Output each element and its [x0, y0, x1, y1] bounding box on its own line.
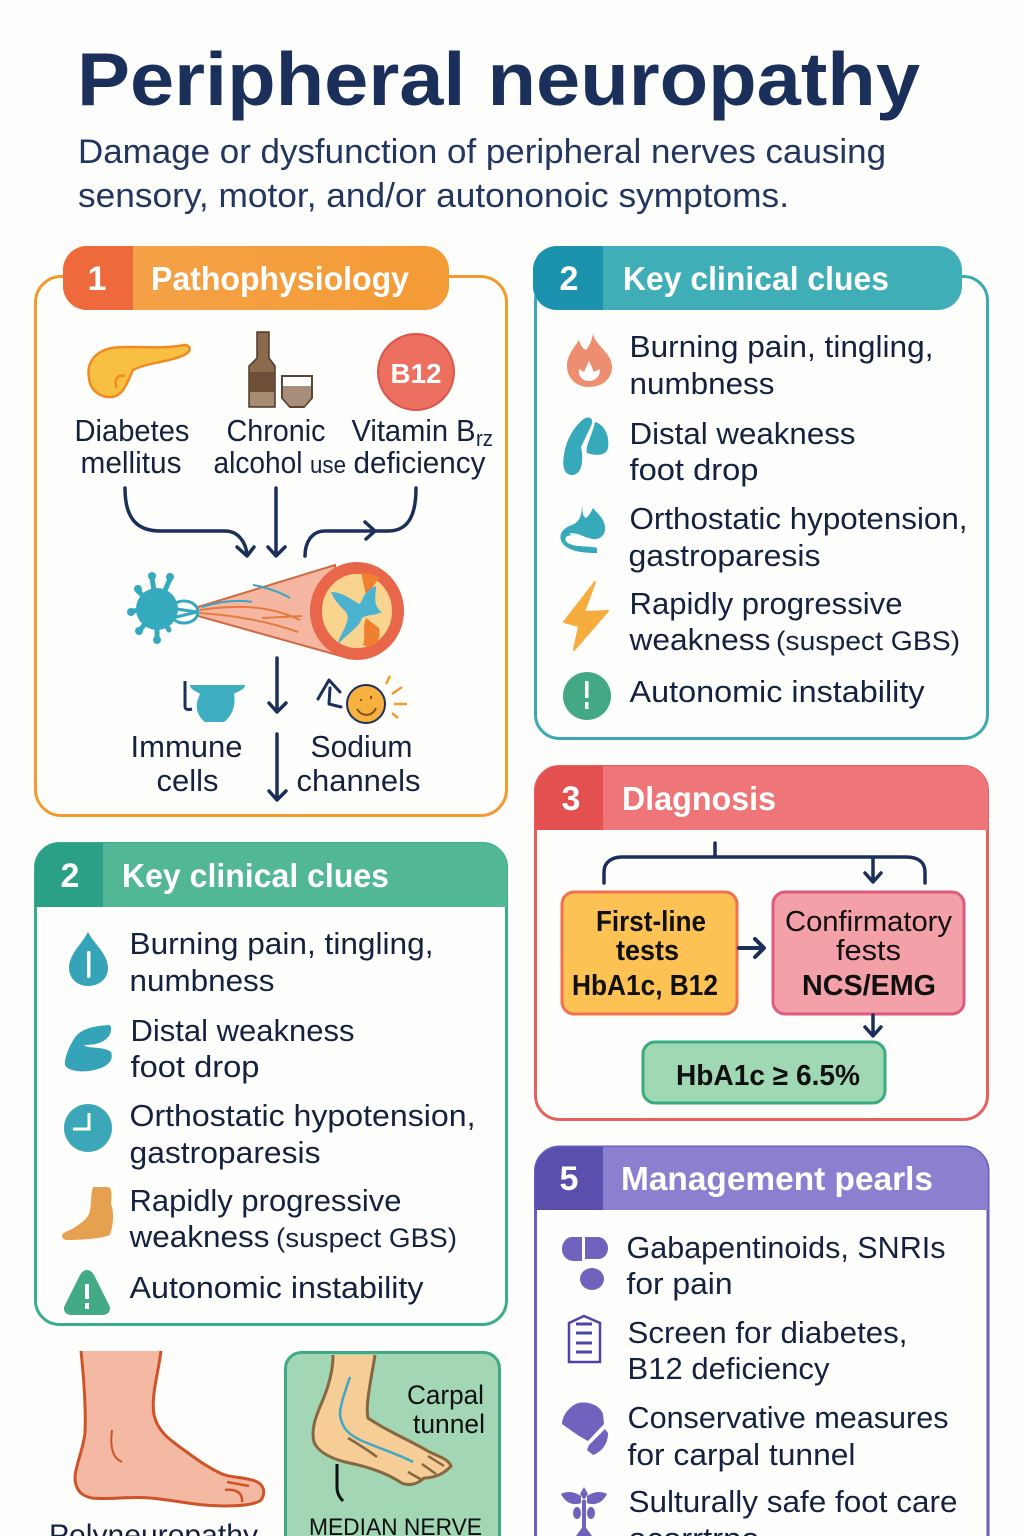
panel header: key clinical clues, green: Key clinical clues: [122, 857, 389, 894]
item: orthostatic hypotension: gastroparesis: [130, 1136, 320, 1170]
item: burning pain: Burning pain, tingling,: [130, 927, 434, 961]
icon: vitamin B12: [378, 334, 454, 410]
box: first-line tests: HbA1c, B12: [572, 970, 718, 1002]
panel header: diagnosis: [535, 766, 988, 830]
panel header: pathophysiology: [63, 246, 449, 310]
label: carpal tunnel: [407, 1380, 485, 1439]
label: sodium channels: Sodium: [310, 730, 412, 764]
box: confirmatory tests: [773, 892, 964, 1014]
item: screen: Screen for diabetes,: [628, 1316, 908, 1350]
panel: pathophysiology: [36, 246, 506, 816]
label: diabetes mellitus: [74, 414, 190, 480]
label: immune cells: Immune: [130, 730, 242, 764]
icon: wrist brace: [562, 1403, 608, 1455]
label: carpal tunnel: tunnel: [413, 1409, 485, 1439]
icon: stomach: [560, 505, 605, 553]
item: distal weakness: Distal weakness: [630, 417, 856, 451]
panel: key clinical clues, green: [35, 843, 507, 1324]
item: rapidly progressive weakness: (suspect GBS): [276, 1223, 457, 1253]
icon: vitamin B12: B12: [390, 358, 442, 389]
box: confirmatory tests: NCS/EMG: [802, 970, 936, 1002]
label: diabetes mellitus: Diabetes: [74, 414, 190, 448]
icon: lightning bolt: [564, 582, 608, 650]
icon: sodium channel face: [318, 676, 407, 723]
panel header: key clinical clues, green: [35, 843, 507, 907]
item: conservative measures: for carpal tunnel: [628, 1438, 856, 1472]
item: autonomic instability: Autonomic instability: [630, 675, 925, 709]
subtitle: [78, 133, 886, 215]
item: distal weakness: foot drop: [130, 1050, 260, 1084]
panel header: key clinical clues, teal: Key clinical clues: [623, 260, 889, 297]
item: distal weakness: Distal weakness: [130, 1014, 354, 1048]
label: vitamin B12 deficiency: deficiency: [354, 446, 486, 480]
label: vitamin B12 deficiency: Vitamin B: [352, 414, 476, 448]
panel header: key clinical clues, teal: [533, 246, 962, 310]
panel header: key clinical clues, green: 2: [61, 857, 79, 895]
panel: diagnosis: [535, 766, 988, 1120]
item: rapidly progressive weakness: Rapidly progressive: [130, 1184, 402, 1218]
icon: caduceus: [561, 1487, 607, 1536]
icon: muscle: [65, 1025, 112, 1071]
label: immune cells: cells: [156, 764, 218, 798]
illustration: polyneuropathy foot: [75, 1351, 264, 1506]
item: autonomic instability: Autonomic instability: [130, 1271, 424, 1305]
icon: clipboard: [569, 1316, 600, 1362]
item: burning pain: [130, 927, 434, 998]
label: immune cells: [130, 730, 242, 798]
item: gabapentinoids: [626, 1231, 946, 1301]
arrow: first-line to confirmatory: [739, 939, 764, 957]
item: orthostatic hypotension: Orthostatic hypotension,: [630, 502, 968, 536]
item: gabapentinoids: for pain: [626, 1267, 732, 1301]
label: vitamin B12 deficiency: [352, 414, 493, 480]
arrows: test bracket: [604, 843, 925, 883]
icon: clock: [64, 1104, 112, 1152]
item: conservative measures: [628, 1401, 948, 1472]
item: rapidly progressive weakness: Rapidly progressive: [630, 587, 902, 621]
item: burning pain: Burning pain, tingling,: [630, 330, 934, 364]
box: confirmatory tests: Confirmatory: [785, 906, 952, 938]
box: first-line tests: [562, 892, 737, 1014]
item: foot care: Sulturally safe foot care: [628, 1485, 958, 1519]
arrow: lower: [269, 734, 286, 800]
item: screen: B12 deficiency: [628, 1352, 830, 1386]
subtitle: sensory, motor, and/or autononoic symptoms.: [78, 177, 789, 215]
label: sodium channels: channels: [296, 764, 420, 798]
panel: key clinical clues, teal: [533, 246, 988, 738]
label: chronic alcohol use: use: [310, 452, 346, 479]
item: orthostatic hypotension: gastroparesis: [628, 539, 820, 573]
illustration: nerve cross-section: [127, 565, 398, 658]
item: foot care: [628, 1485, 958, 1536]
box: HbA1c threshold: [643, 1042, 885, 1103]
item: distal weakness: [630, 417, 856, 487]
arrows: causes converge on nerve: [125, 488, 416, 556]
panel header: diagnosis: 3: [562, 780, 580, 818]
panel header: pathophysiology: 1: [88, 260, 106, 298]
label: chronic alcohol use: alcohol: [214, 446, 302, 480]
label: vitamin B12 deficiency: rz: [476, 426, 493, 451]
item: orthostatic hypotension: Orthostatic hypotension,: [130, 1099, 476, 1133]
box: first-line tests: First-line: [596, 906, 706, 938]
box: confirmatory tests: fests: [836, 935, 901, 967]
label: diabetes mellitus: mellitus: [80, 446, 182, 480]
item: gabapentinoids: Gabapentinoids, SNRIs: [626, 1231, 946, 1265]
item: distal weakness: foot drop: [630, 453, 758, 487]
panel header: pathophysiology: Pathophysiology: [151, 260, 410, 297]
label: chronic alcohol use: [214, 414, 346, 480]
box: HbA1c threshold: HbA1c ≥ 6.5%: [676, 1060, 860, 1092]
icon: foot: [62, 1187, 113, 1240]
icon: alert circle: [563, 672, 611, 720]
panel header: management pearls: [535, 1147, 988, 1210]
item: rapidly progressive weakness: weakness: [128, 1220, 270, 1254]
label: sodium channels: [296, 730, 420, 798]
item: burning pain: numbness: [130, 964, 274, 998]
panel header: management pearls: 5: [560, 1160, 578, 1198]
label: carpal tunnel: Carpal: [407, 1380, 484, 1410]
panel header: management pearls: Management pearls: [621, 1160, 933, 1197]
subtitle: Damage or dysfunction of peripheral nerves causing: [78, 133, 886, 171]
icon: immune cells: [185, 681, 245, 722]
icon: muscle: [563, 417, 608, 475]
panel header: diagnosis: Dlagnosis: [622, 780, 776, 817]
icon: pills: [562, 1237, 608, 1290]
panel: carpal tunnel: [286, 1352, 500, 1536]
icon: bottle and glass: [249, 332, 312, 407]
title: Peripheral neuropathy: [77, 37, 920, 121]
icon: pancreas: [88, 345, 190, 397]
panel header: key clinical clues, teal: 2: [560, 260, 578, 298]
box: first-line tests: tests: [616, 935, 679, 967]
item: burning pain: [630, 330, 934, 401]
item: burning pain: numbness: [630, 367, 774, 401]
item: orthostatic hypotension: [130, 1099, 476, 1170]
icon: warning triangle: [64, 1270, 110, 1315]
item: screen: [628, 1316, 908, 1386]
item: rapidly progressive weakness: (suspect GBS): [776, 626, 960, 656]
item: distal weakness: [130, 1014, 354, 1084]
item: orthostatic hypotension: [628, 502, 968, 573]
item: rapidly progressive weakness: weakness: [628, 623, 770, 657]
item: rapidly progressive weakness: [628, 587, 960, 657]
arrow: confirmatory to threshold: [865, 1015, 881, 1036]
item: rapidly progressive weakness: [128, 1184, 457, 1254]
panel: management pearls: [535, 1147, 988, 1536]
icon: flame: [567, 333, 612, 387]
label: chronic alcohol use: Chronic: [226, 414, 326, 448]
illustration: median nerve foot: [313, 1355, 451, 1501]
item: conservative measures: Conservative measures: [628, 1401, 948, 1435]
icon: droplet: [69, 932, 108, 986]
arrow: nerve to mechanisms: [269, 658, 286, 712]
